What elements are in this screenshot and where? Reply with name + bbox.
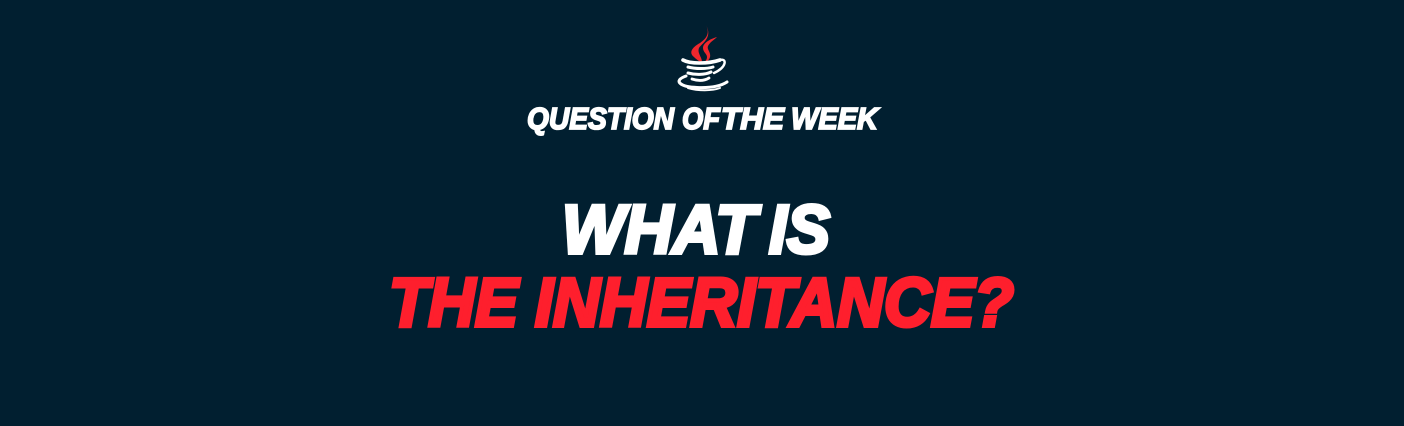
- heading line 1: IS: [769, 191, 830, 268]
- icon: white cup and saucer: [679, 60, 727, 90]
- subtitle: QUESTION: [527, 101, 675, 136]
- heading line 2: INHERITANCE?: [535, 264, 1014, 341]
- icon: red steam flames: [691, 25, 717, 62]
- subtitle: [527, 101, 880, 136]
- icon: java coffee cup: [679, 25, 727, 90]
- heading line 2: THE: [389, 264, 520, 341]
- subtitle: OF: [682, 101, 721, 136]
- subtitle: THE: [721, 101, 785, 136]
- heading line 1: WHAT: [562, 191, 761, 268]
- subtitle: WEEK: [791, 101, 880, 136]
